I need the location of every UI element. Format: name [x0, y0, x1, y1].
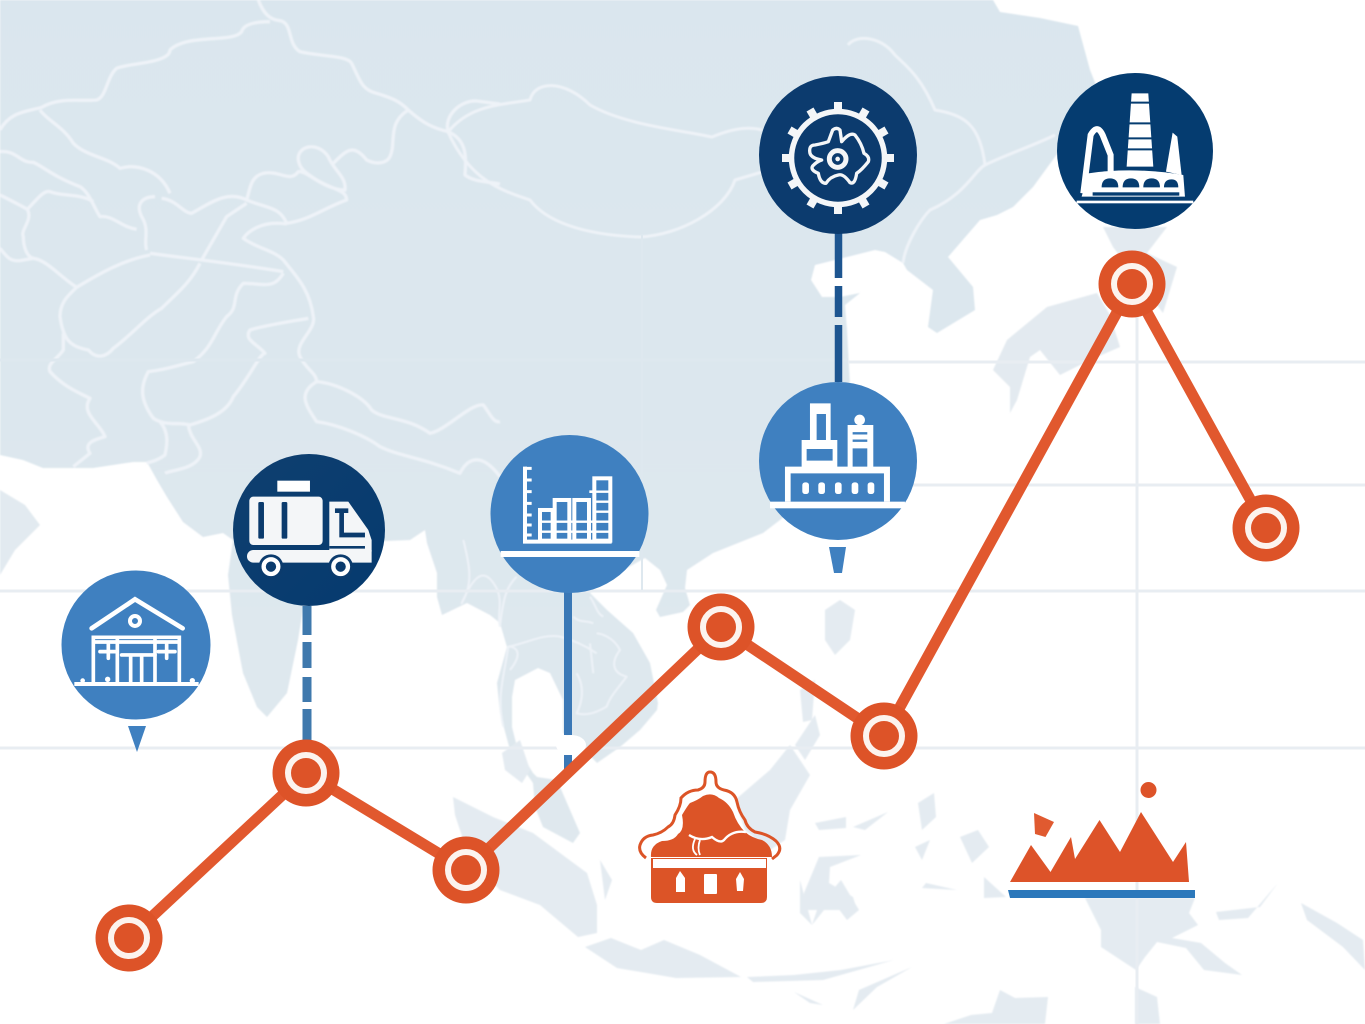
pin 4: gear [759, 76, 917, 382]
blue base [1008, 890, 1195, 898]
icon: warehouse [74, 599, 199, 684]
pin pointer [829, 547, 846, 573]
data point 6 [1098, 250, 1166, 318]
icon: gear [782, 102, 894, 214]
flag [1034, 813, 1054, 837]
map: Japan and northern islands [993, 227, 1177, 413]
icon: truck [247, 481, 372, 579]
map: mainland landmass [0, 0, 1100, 843]
sun [1140, 782, 1156, 798]
data point 4 [688, 594, 754, 660]
data point 7 [1232, 494, 1300, 562]
chart grid lines [0, 235, 1365, 1024]
icon: factory [770, 403, 905, 508]
dashed connector [302, 606, 312, 740]
data point 3 [432, 836, 500, 904]
map: Southeast Asian islands [453, 600, 1365, 1024]
icon: orange temple [640, 772, 780, 903]
icon: orange mountains with blue base [1008, 782, 1195, 898]
map: country borders west [0, 0, 500, 477]
pin 6: power plant [1057, 73, 1213, 229]
pin 3: bar chart [490, 435, 648, 770]
map: Southeast Asia borders [462, 540, 627, 727]
icon: power plant [1077, 93, 1193, 203]
solid connector [564, 590, 572, 770]
orange trend line [96, 250, 1300, 972]
pin 5: factory [759, 382, 917, 573]
map: western coast fragment [0, 490, 40, 575]
data point 2 [272, 740, 340, 806]
connector gap highlight [556, 735, 586, 755]
data point 1 [96, 904, 162, 972]
icon: rising bars [501, 467, 639, 554]
data point 5 [850, 702, 918, 770]
pin 1: warehouse [62, 570, 210, 752]
segmented connector [835, 232, 842, 382]
pin 2: truck [233, 454, 385, 740]
map: country borders north and east [448, 38, 1055, 263]
pin pointer [128, 726, 146, 752]
